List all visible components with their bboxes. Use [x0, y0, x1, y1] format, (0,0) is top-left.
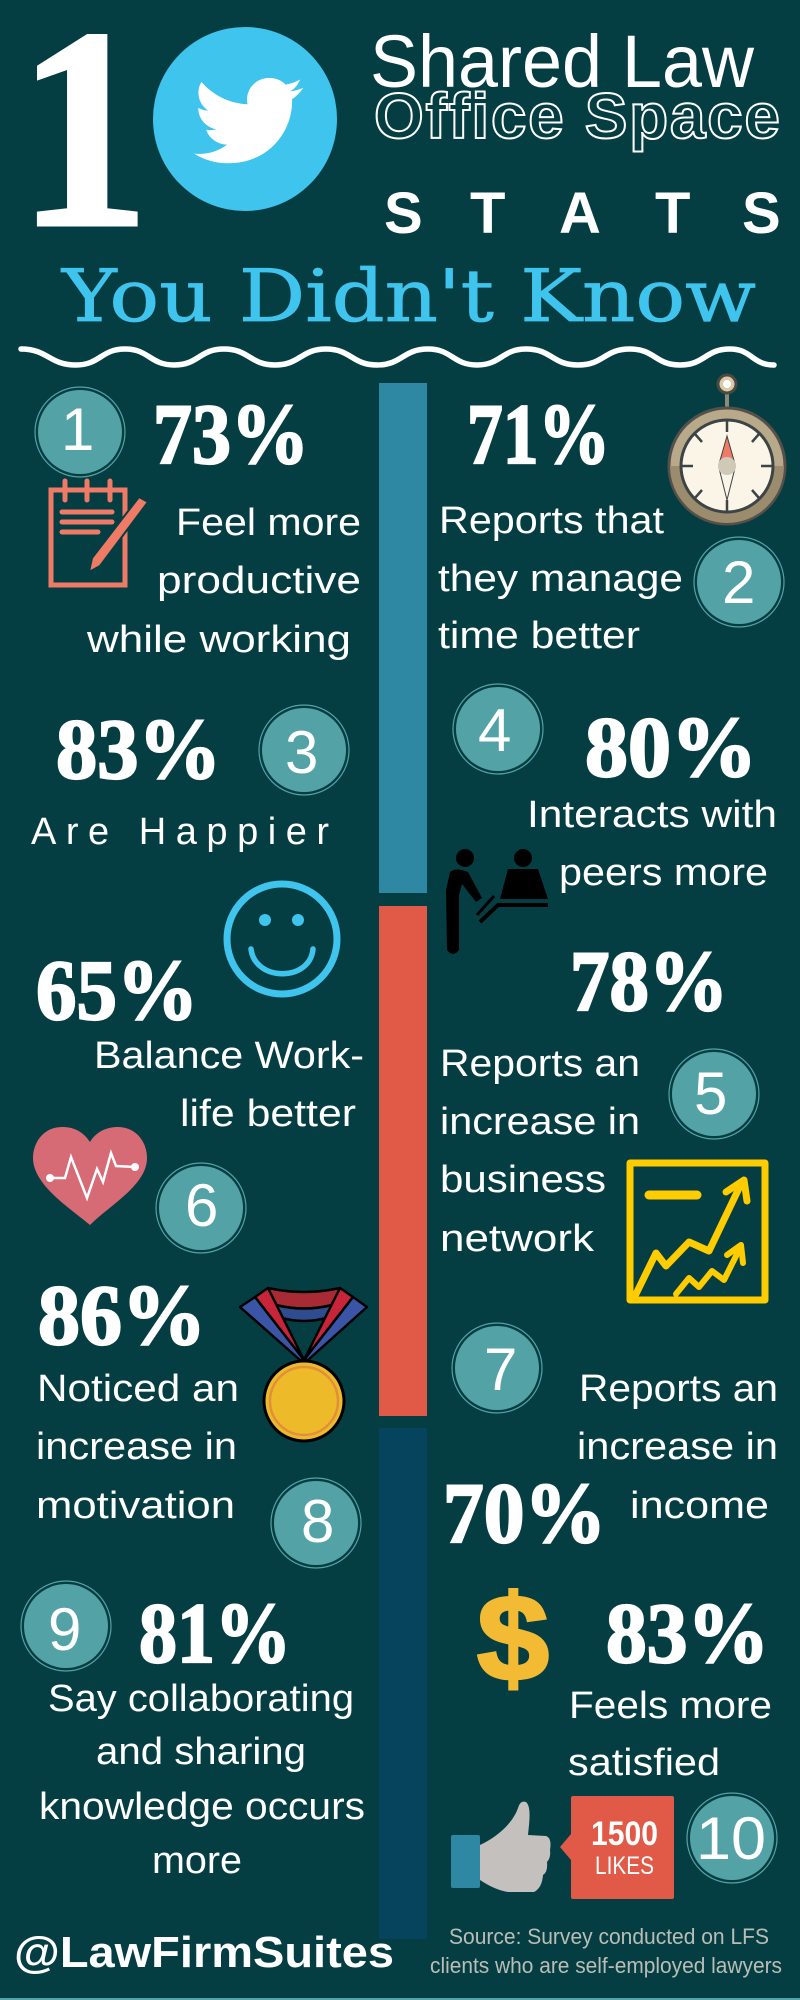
percent 86%: 86% — [38, 1267, 206, 1363]
stat 7: 70% income — [443, 1323, 778, 1561]
icon: heart with pulse — [33, 1127, 147, 1225]
text: say collaborating and sharing knowledge occurs more — [39, 1678, 365, 1882]
text: reports an increase in business network: network — [440, 1218, 595, 1260]
text: feels more satisfied: Feels more — [569, 1685, 772, 1727]
header — [17, 0, 781, 338]
text: reports that they manage time better: they manage — [438, 558, 683, 600]
text: feels more satisfied — [568, 1685, 772, 1784]
likes callout: LIKES — [595, 1852, 654, 1880]
stat 4: 80% interacts with peers — [446, 684, 777, 954]
text: noticed an increase in motivation: increase in — [36, 1426, 237, 1468]
text: balance work-life better: Balance Work- — [94, 1035, 364, 1077]
badge 2: 2 — [722, 549, 755, 616]
stat 2: 71% manage time better — [438, 375, 785, 657]
text: feel more productive: while working — [86, 619, 351, 661]
stat 8: 86% motivation — [36, 1267, 367, 1568]
text: reports an increase in business network: Reports an — [440, 1043, 640, 1085]
badge 8: 8 — [301, 1488, 334, 1555]
icon: smiley — [227, 884, 337, 994]
likes callout: 1500 — [591, 1815, 658, 1853]
percent 78%: 78% — [570, 933, 728, 1029]
icon: twitter bird in circle standing for 0 — [153, 27, 337, 211]
text: reports an increase in income — [577, 1368, 778, 1527]
badge 9: 9 — [48, 1596, 81, 1663]
icon: dollar sign: $ — [477, 1570, 549, 1706]
central timeline bar — [379, 383, 427, 1939]
text: reports an increase in income: increase in — [577, 1426, 778, 1468]
percent 73%: 73% — [153, 386, 309, 482]
badge 3: 3 — [285, 719, 318, 786]
icon: compass — [669, 375, 785, 524]
stat 1: 73% more productive — [35, 386, 361, 661]
percent 83%: 83% — [56, 701, 221, 797]
text: interacts with peers more: Interacts with — [527, 794, 777, 836]
heading: You Didn't Know: You Didn't Know — [61, 254, 756, 338]
text: feel more productive: productive — [157, 560, 361, 602]
percent 65%: 65% — [36, 942, 198, 1038]
text: say collaborating and sharing knowledge occurs more: and sharing — [96, 1731, 306, 1773]
icon: thumbs up — [451, 1802, 550, 1892]
text: balance work-life better: life better — [180, 1093, 356, 1135]
text: feels more satisfied: satisfied — [568, 1742, 720, 1784]
badge 10: 10 — [696, 1805, 766, 1872]
percent 80%: 80% — [585, 699, 757, 795]
text: reports that they manage time better — [438, 500, 683, 657]
icon: rising chart — [630, 1163, 765, 1300]
source note: clients who are self-employed lawyers — [430, 1953, 782, 1978]
badge 5 — [669, 1049, 759, 1139]
percent 70%: 70% — [443, 1465, 606, 1561]
heading: STATS: STATS — [384, 181, 781, 246]
heading: Office Space outlined: Office Space — [374, 80, 780, 152]
stat 3: 83% are happier — [31, 701, 349, 994]
text: feel more productive — [86, 502, 361, 661]
badge 1 — [35, 387, 125, 477]
text: noticed an increase in motivation: Noticed an — [37, 1368, 239, 1410]
badge 10 — [687, 1793, 777, 1883]
text: reports an increase in business network — [440, 1043, 640, 1260]
text: balance work-life better — [94, 1035, 364, 1135]
badge 1: 1 — [61, 396, 94, 463]
text: say collaborating and sharing knowledge occurs more: more — [152, 1840, 242, 1882]
icon: two people at desk — [446, 849, 548, 954]
badge 6 — [156, 1163, 246, 1253]
text: reports an increase in business network: business — [440, 1159, 606, 1201]
text: noticed an increase in motivation: motivation — [36, 1485, 235, 1527]
footer handle: @LawFirmSuites — [14, 1928, 394, 1977]
icon: notepad and pencil — [51, 481, 148, 585]
badge 3 — [259, 705, 349, 795]
source note: Source: Survey conducted on LFS — [449, 1924, 769, 1949]
text: feel more productive: Feel more — [176, 502, 361, 544]
text: reports an increase in income: income — [630, 1485, 769, 1527]
text: reports an increase in business network: increase in — [440, 1101, 640, 1143]
stat 9: 81% collaborating — [21, 1581, 365, 1882]
percent 81%: 81% — [139, 1585, 291, 1681]
badge 4 — [453, 684, 543, 774]
text: say collaborating and sharing knowledge occurs more: Say collaborating — [48, 1678, 354, 1720]
badge 8 — [271, 1478, 361, 1568]
percent 71%: 71% — [467, 386, 610, 482]
badge 9 — [21, 1581, 111, 1671]
badge 6: 6 — [185, 1172, 218, 1239]
badge 2 — [694, 537, 784, 627]
percent 83%: 83% — [606, 1585, 769, 1681]
text: say collaborating and sharing knowledge occurs more: knowledge occurs — [39, 1786, 365, 1828]
source note — [430, 1924, 782, 1978]
badge 5: 5 — [694, 1060, 727, 1127]
stat 10: 83% satisfied — [451, 1570, 777, 1899]
stat 5: 78% business network — [440, 933, 765, 1300]
text: reports that they manage time better: time better — [438, 615, 640, 657]
text: reports that they manage time better: Reports that — [439, 500, 664, 542]
badge 4: 4 — [478, 697, 511, 764]
icon: medal — [240, 1288, 367, 1441]
likes callout — [560, 1796, 674, 1899]
badge 7: 7 — [484, 1336, 517, 1403]
text: reports an increase in income: Reports an — [579, 1368, 778, 1410]
badge 7 — [452, 1323, 542, 1413]
text: interacts with peers more — [527, 794, 777, 894]
stat 6: 65% balance work-life — [33, 942, 364, 1253]
text: are happier: Are Happier — [31, 811, 329, 853]
text: interacts with peers more: peers more — [559, 852, 768, 894]
heading: Shared Law: Shared Law — [370, 20, 755, 103]
text: noticed an increase in motivation — [36, 1368, 239, 1527]
